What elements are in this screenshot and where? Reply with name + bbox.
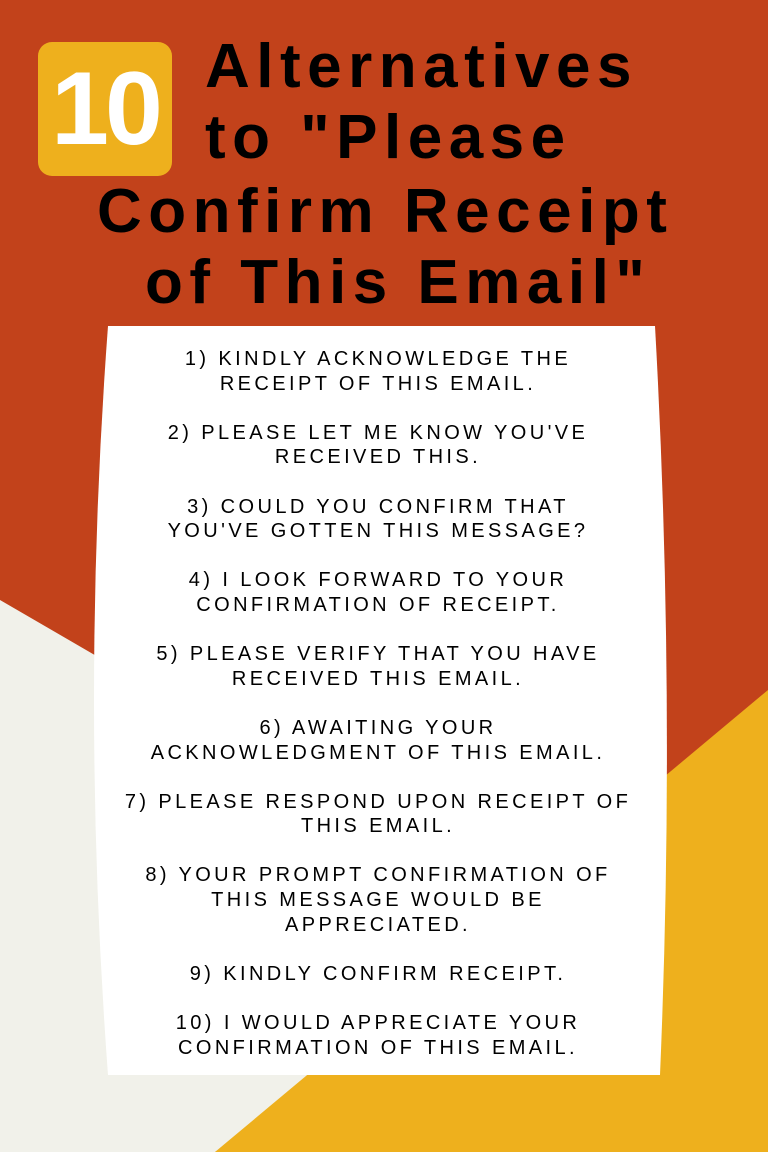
title: Confirm Receipt	[97, 177, 673, 246]
title: Alternatives	[205, 32, 638, 101]
title: to "Please	[205, 103, 572, 172]
panel: list of alternatives: 10) I WOULD APPRECIATE YOUR	[176, 1012, 580, 1034]
panel: list of alternatives: RECEIVED THIS EMAIL.	[232, 668, 524, 690]
panel: list of alternatives: 9) KINDLY CONFIRM RECEIPT.	[190, 963, 566, 985]
title: of This Email"	[145, 248, 651, 317]
panel: list of alternatives: RECEIVED THIS.	[275, 446, 481, 468]
panel: list of alternatives: THIS EMAIL.	[301, 815, 455, 837]
panel: list of alternatives: 3) COULD YOU CONFIRM THAT	[187, 496, 569, 518]
panel: list of alternatives: CONFIRMATION OF RECEIPT.	[196, 594, 560, 616]
panel: list of alternatives: RECEIPT OF THIS EMAIL.	[220, 373, 536, 395]
title	[97, 32, 673, 317]
panel: list of alternatives: 7) PLEASE RESPOND UPON RECEIPT OF	[125, 791, 631, 813]
panel: list of alternatives: THIS MESSAGE WOULD BE	[211, 889, 545, 911]
panel: list of alternatives: 6) AWAITING YOUR	[259, 717, 497, 739]
panel: list of alternatives: 4) I LOOK FORWARD TO YOUR	[189, 569, 567, 591]
panel: list of alternatives: 2) PLEASE LET ME KNOW YOU'VE	[168, 422, 588, 444]
panel: list of alternatives: 8) YOUR PROMPT CONFIRMATION OF	[145, 864, 611, 886]
panel: list of alternatives: 1) KINDLY ACKNOWLEDGE THE	[185, 348, 571, 370]
panel: list of alternatives: CONFIRMATION OF THIS EMAIL.	[178, 1037, 578, 1059]
panel: list of alternatives: ACKNOWLEDGMENT OF THIS EMAIL.	[151, 742, 605, 764]
badge: 10	[38, 42, 172, 176]
badge: 10: 10	[51, 51, 159, 167]
panel: list of alternatives	[94, 326, 667, 1075]
panel: list of alternatives: 5) PLEASE VERIFY THAT YOU HAVE	[156, 643, 600, 665]
panel: list of alternatives: APPRECIATED.	[285, 914, 471, 936]
panel: list of alternatives: YOU'VE GOTTEN THIS MESSAGE?	[168, 520, 588, 542]
